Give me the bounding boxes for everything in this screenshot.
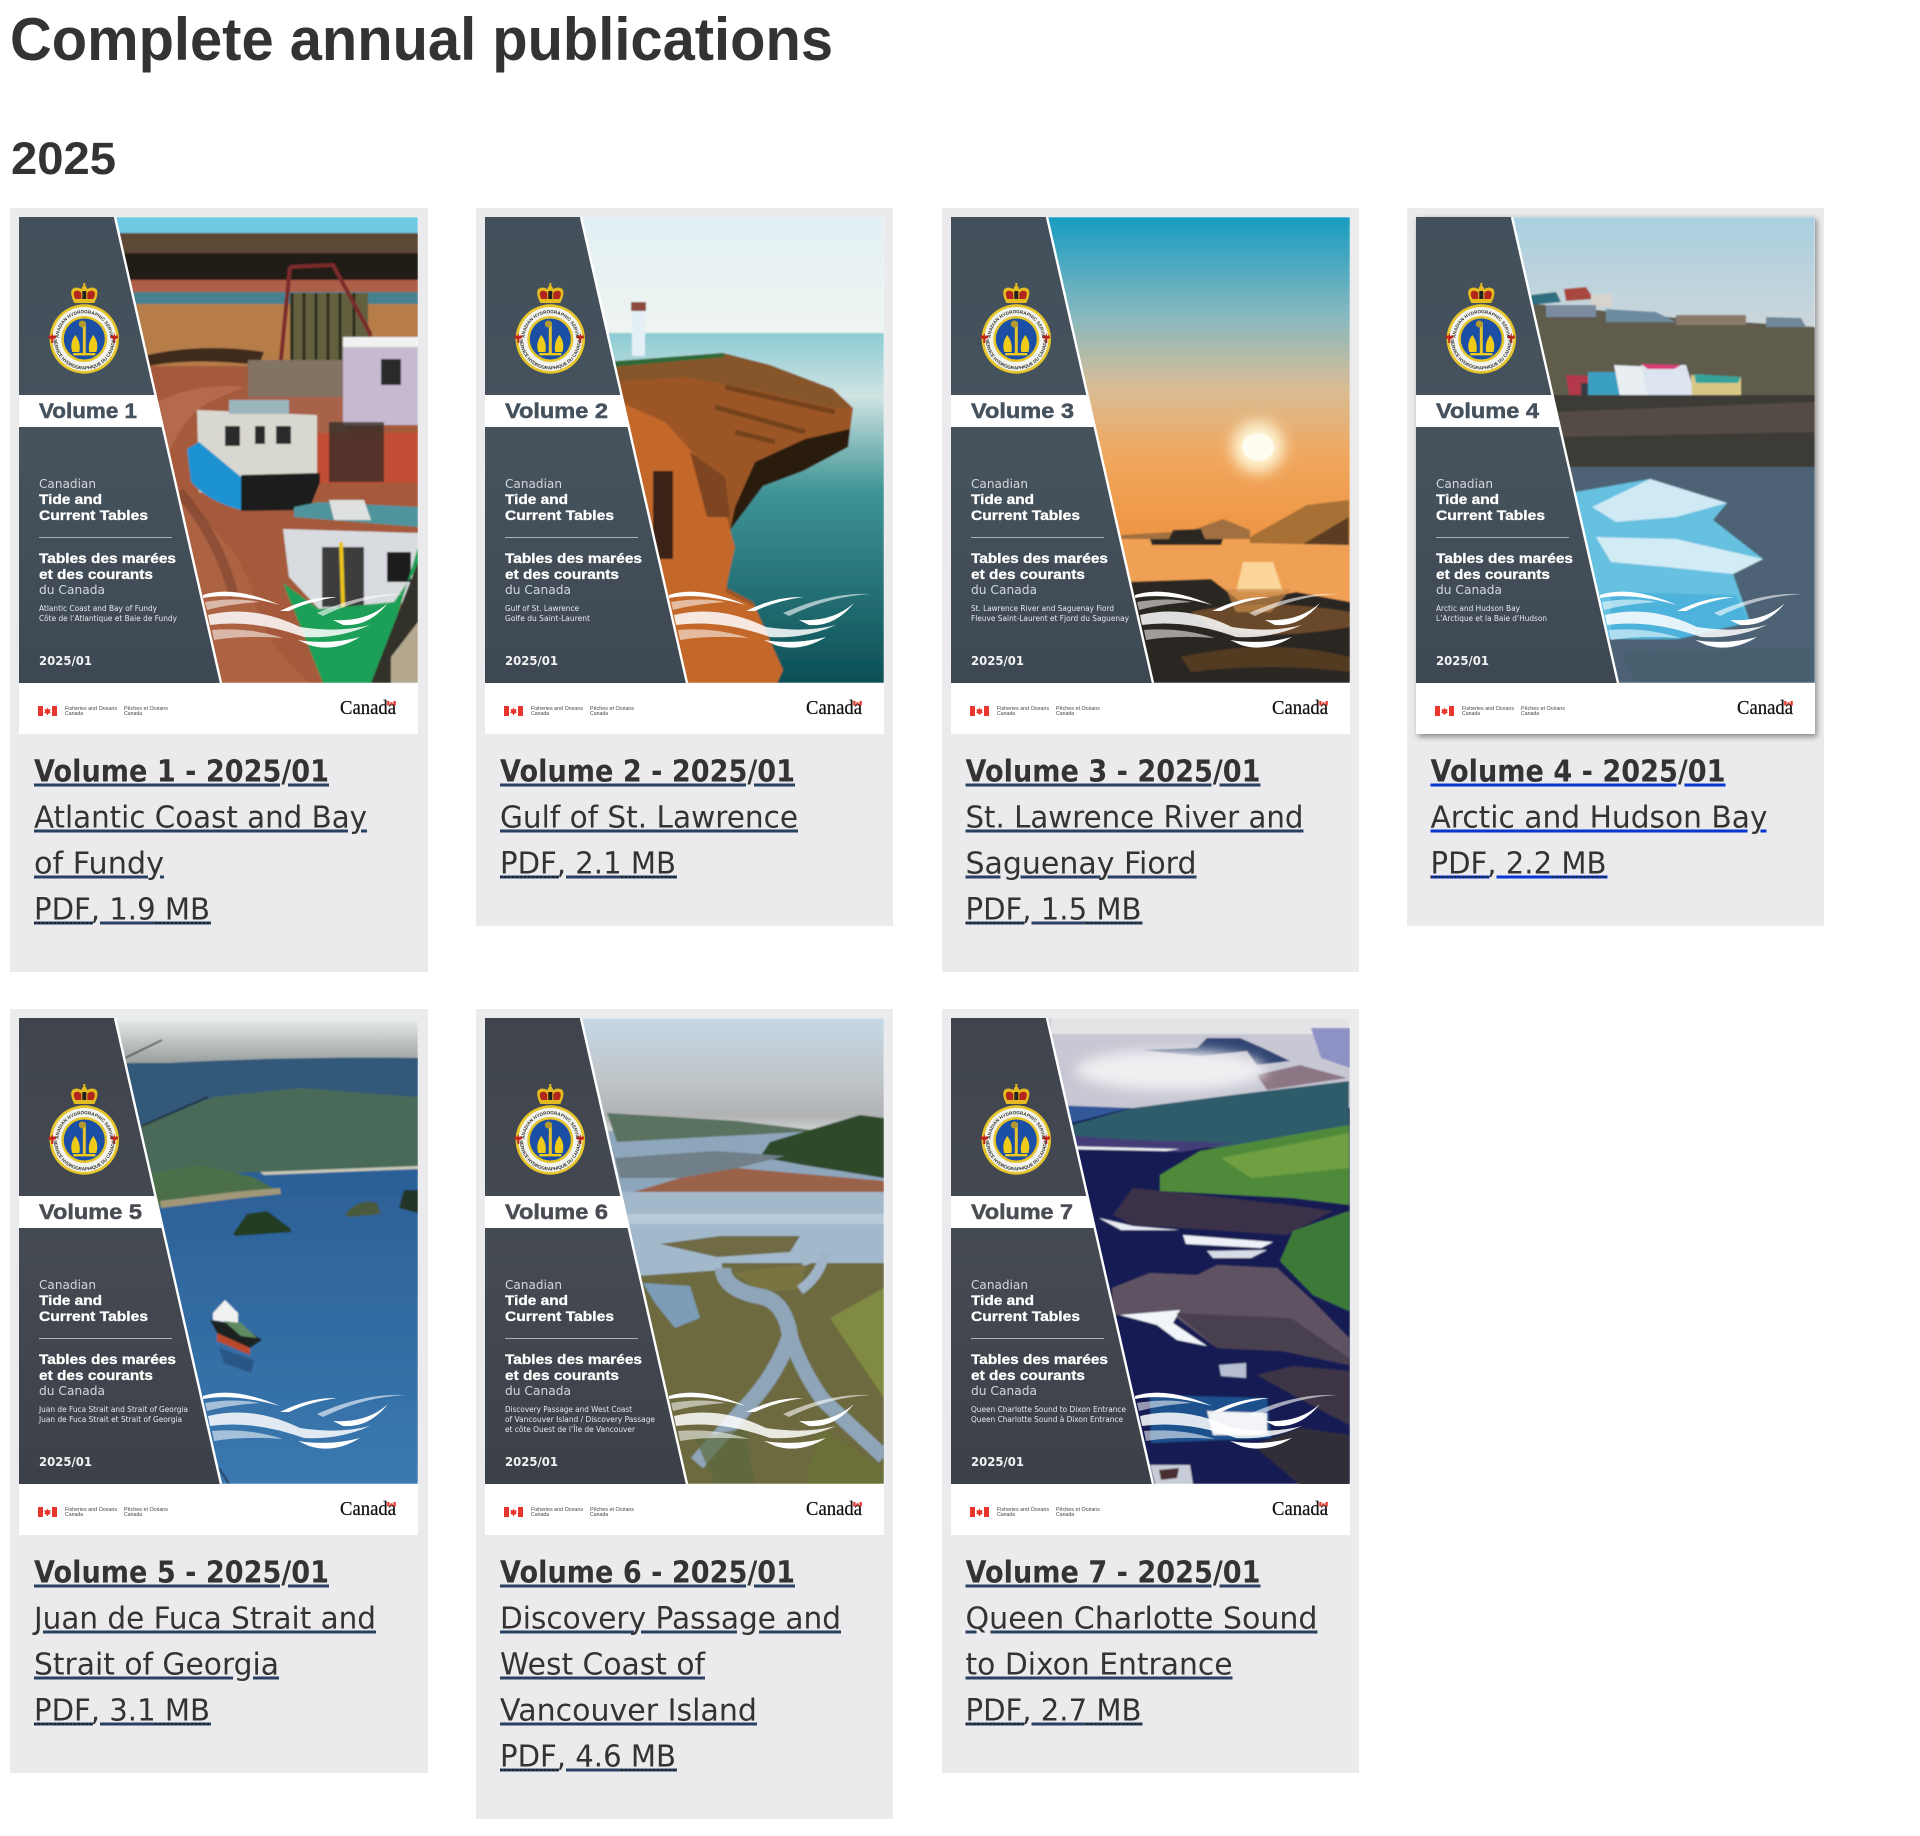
emblem ring text: SERVICE HYDROGRAPHIQUE DU CANADA bbox=[986, 339, 1047, 370]
link text: Volume 6: Vancouver Island bbox=[500, 1694, 757, 1728]
cover title text bbox=[38, 1277, 188, 1469]
footer logos: Pêches et Océans bbox=[1521, 706, 1565, 712]
footer logos bbox=[504, 697, 862, 719]
cover title text: du Canada bbox=[970, 1383, 1036, 1398]
footer logos: Canada bbox=[340, 1498, 396, 1520]
cover title text: Tables des marées bbox=[970, 1351, 1108, 1367]
link text: Volume 6: PDF, 4.6 MB bbox=[500, 1740, 676, 1774]
link text: Volume 3: PDF, 1.5 MB bbox=[965, 892, 1141, 928]
cover title text bbox=[970, 476, 1129, 668]
cover title text: Canadian bbox=[39, 476, 96, 491]
cover title text: 2025/01 bbox=[505, 653, 558, 668]
wave motif bbox=[669, 1393, 871, 1449]
footer logos: Pêches et Océans bbox=[1056, 1507, 1100, 1513]
footer logos bbox=[38, 1498, 396, 1520]
cover title text: of Vancouver Island / Discovery Passage bbox=[505, 1415, 655, 1424]
footer logos bbox=[1435, 697, 1793, 719]
cover title text: 2025/01 bbox=[1436, 653, 1489, 668]
card: Volume 7 bbox=[942, 1009, 1359, 1773]
diagonal edge bbox=[115, 1018, 221, 1484]
volume band bbox=[19, 395, 163, 427]
footer logos bbox=[38, 697, 396, 719]
cover title text: Discovery Passage and West Coast bbox=[505, 1405, 632, 1414]
cover title text: 2025/01 bbox=[39, 653, 92, 668]
link text: Volume 2: Volume 2 - 2025/01 bbox=[500, 754, 795, 790]
cover title text: Golfe du Saint-Laurent bbox=[505, 614, 590, 623]
footer logos: Pêches et Océans bbox=[124, 706, 168, 712]
volume label: Volume 2 bbox=[505, 400, 608, 423]
card: Volume 6 bbox=[476, 1009, 893, 1819]
volume band bbox=[485, 1196, 629, 1228]
dark panel bbox=[19, 217, 221, 683]
link text: Volume 4 bbox=[1430, 754, 1768, 882]
emblem ring text: CANADIAN HYDROGRAPHIC SERVICE bbox=[988, 310, 1046, 338]
link text: Volume 1: Volume 1 - 2025/01 bbox=[34, 754, 329, 790]
footer logos: Pêches et Océans bbox=[590, 706, 634, 712]
emblem ring text bbox=[986, 310, 1047, 370]
footer logos: Fisheries and Oceans bbox=[531, 706, 583, 712]
cover title text: Tide and bbox=[970, 1292, 1034, 1308]
emblem ring text bbox=[520, 1111, 581, 1170]
volume band bbox=[19, 1196, 163, 1228]
link text: Volume 2 bbox=[500, 754, 798, 882]
link text: Volume 7: Volume 7 - 2025/01 bbox=[965, 1556, 1260, 1590]
cover title text: Tables des marées bbox=[39, 550, 176, 566]
footer logos: Canada bbox=[590, 711, 608, 717]
photo: arctic village and sea ice bbox=[1513, 217, 1815, 683]
emblem bbox=[48, 1084, 119, 1175]
link text: Volume 7: to Dixon Entrance bbox=[965, 1648, 1232, 1682]
footer logos: Fisheries and Oceans bbox=[65, 706, 117, 712]
footer logos: Pêches et Océans bbox=[590, 1507, 634, 1513]
cover title text: Current Tables bbox=[970, 1308, 1080, 1324]
photo: estuary and marsh channels bbox=[582, 1018, 884, 1484]
dark panel bbox=[950, 217, 1152, 683]
link text: Volume 2: Gulf of St. Lawrence bbox=[500, 800, 798, 836]
cover title text: Tables des marées bbox=[39, 1351, 176, 1367]
footer logos: Fisheries and Oceans bbox=[1462, 706, 1514, 712]
link text: Volume 1: of Fundy bbox=[34, 846, 164, 882]
emblem bbox=[980, 1084, 1050, 1175]
link text: Volume 5 bbox=[32, 1556, 376, 1728]
wave motif bbox=[1134, 592, 1336, 648]
link text: Volume 7: PDF, 2.7 MB bbox=[965, 1694, 1141, 1728]
cover title text: Canadian bbox=[505, 476, 562, 491]
dark panel bbox=[950, 1018, 1152, 1484]
photo: sunset over fjord with ferry bbox=[1048, 217, 1350, 683]
cover title text: du Canada bbox=[1436, 582, 1502, 597]
cover title text: Canadian bbox=[970, 1277, 1028, 1292]
cover title text: Canadian bbox=[1436, 476, 1493, 491]
footer logos: Pêches et Océans bbox=[1056, 706, 1100, 712]
diagonal edge bbox=[581, 217, 687, 683]
cover title text: du Canada bbox=[39, 1383, 105, 1398]
volume label: Volume 4 bbox=[1436, 400, 1539, 423]
link text: Volume 6: Volume 6 - 2025/01 bbox=[500, 1556, 795, 1590]
card: Volume 2 bbox=[476, 208, 893, 926]
emblem ring text: CANADIAN HYDROGRAPHIC SERVICE bbox=[56, 1111, 114, 1139]
cover title text: Canadian bbox=[970, 476, 1028, 491]
cover title text: Current Tables bbox=[1436, 507, 1545, 523]
cover title text: Current Tables bbox=[39, 507, 148, 523]
footer logos: Canada bbox=[124, 711, 142, 717]
cover title text: du Canada bbox=[505, 1383, 571, 1398]
cover title text: Côte de l’Atlantique et Baie de Fundy bbox=[39, 613, 177, 623]
photo: tanker in a blue strait bbox=[116, 1018, 418, 1484]
link text: Volume 3: Volume 3 - 2025/01 bbox=[965, 754, 1260, 790]
footer logos bbox=[970, 697, 1328, 719]
cover title text: 2025/01 bbox=[39, 1454, 92, 1469]
link text: Volume 6: Discovery Passage and bbox=[500, 1602, 841, 1636]
diagonal edge bbox=[115, 217, 221, 683]
cover title text: Tables des marées bbox=[505, 1351, 642, 1367]
link text: Volume 7: Queen Charlotte Sound bbox=[965, 1602, 1317, 1636]
cover title text: Queen Charlotte Sound to Dixon Entrance bbox=[970, 1405, 1126, 1414]
cover title text: Tide and bbox=[39, 1292, 102, 1308]
footer logos: Canada bbox=[996, 1512, 1015, 1518]
link text: Volume 2: PDF, 2.1 MB bbox=[500, 846, 676, 882]
cover title text: et des courants bbox=[1436, 566, 1550, 582]
cover title text: 2025/01 bbox=[505, 1454, 558, 1469]
emblem ring text: SERVICE HYDROGRAPHIQUE DU CANADA bbox=[520, 339, 581, 370]
footer logos: Canada bbox=[1056, 1512, 1074, 1518]
cover title text: Tide and bbox=[39, 491, 102, 507]
card: Volume 4 bbox=[1407, 208, 1824, 926]
cover title text: du Canada bbox=[39, 582, 105, 597]
volume label: Volume 3 bbox=[970, 400, 1074, 423]
cover title text: Tide and bbox=[970, 491, 1034, 507]
cover title text: et côte Ouest de l’Île de Vancouver bbox=[505, 1423, 636, 1434]
cover title text: Tables des marées bbox=[970, 550, 1108, 566]
card: Volume 1 bbox=[10, 208, 428, 972]
diagonal edge bbox=[1512, 217, 1618, 683]
footer logos bbox=[970, 1498, 1328, 1520]
dark panel bbox=[19, 1018, 221, 1484]
cover title text: Current Tables bbox=[505, 507, 614, 523]
volume band bbox=[950, 395, 1094, 427]
wave motif bbox=[1600, 592, 1802, 648]
footer logos: Canada bbox=[65, 1512, 83, 1518]
link text: Volume 5: Juan de Fuca Strait and bbox=[32, 1602, 376, 1636]
volume label: Volume 6 bbox=[505, 1201, 608, 1224]
emblem ring text: SERVICE HYDROGRAPHIQUE DU CANADA bbox=[54, 1140, 115, 1170]
cover: Volume 7 bbox=[951, 1018, 1350, 1535]
wave motif bbox=[669, 592, 871, 648]
volume band bbox=[485, 395, 629, 427]
emblem bbox=[1445, 283, 1516, 374]
cover title text: Canadian bbox=[39, 1277, 96, 1292]
link text: Volume 6: West Coast of bbox=[500, 1648, 706, 1682]
cover title text bbox=[505, 1277, 655, 1469]
diagonal edge bbox=[581, 1018, 687, 1484]
cover title text: L’Arctique et la Baie d’Hudson bbox=[1436, 614, 1547, 623]
title: Complete annual publications bbox=[10, 6, 833, 73]
emblem ring text: SERVICE HYDROGRAPHIQUE DU CANADA bbox=[54, 339, 115, 370]
link text: Volume 5: Volume 5 - 2025/01 bbox=[34, 1556, 329, 1590]
volume label: Volume 7 bbox=[970, 1201, 1073, 1224]
cover title text: Arctic and Hudson Bay bbox=[1436, 604, 1520, 613]
emblem ring text: CANADIAN HYDROGRAPHIC SERVICE bbox=[988, 1111, 1046, 1139]
emblem bbox=[48, 283, 119, 374]
link text: Volume 4: Volume 4 - 2025/01 bbox=[1430, 754, 1726, 790]
cover title text: du Canada bbox=[505, 582, 571, 597]
wave motif bbox=[203, 592, 405, 648]
volume band bbox=[950, 1196, 1094, 1228]
cover: Volume 5 bbox=[19, 1018, 418, 1535]
emblem ring text bbox=[986, 1111, 1047, 1170]
footer logos: Canada bbox=[1462, 711, 1480, 717]
footer logos: Canada bbox=[806, 1498, 862, 1520]
link text: Volume 7 bbox=[965, 1556, 1317, 1728]
link text: Volume 6 bbox=[500, 1556, 841, 1774]
cover title text: et des courants bbox=[970, 566, 1085, 582]
emblem ring text bbox=[54, 1111, 115, 1170]
cover: Volume 1 bbox=[19, 217, 418, 734]
footer logos: Canada bbox=[340, 697, 396, 719]
cover title text: Current Tables bbox=[970, 507, 1080, 523]
footer logos: Canada bbox=[1737, 697, 1793, 719]
cover title text: et des courants bbox=[505, 566, 619, 582]
cover title text: et des courants bbox=[39, 1367, 153, 1383]
footer logos: Fisheries and Oceans bbox=[996, 706, 1049, 712]
diagonal edge bbox=[1046, 1018, 1152, 1484]
link text: Volume 4: Arctic and Hudson Bay bbox=[1430, 800, 1768, 836]
cover title text: Tide and bbox=[505, 491, 568, 507]
link text: Volume 3: Saguenay Fiord bbox=[965, 846, 1196, 882]
cover title text: Tide and bbox=[1436, 491, 1499, 507]
cover title text: Fleuve Saint-Laurent et Fjord du Saguenay bbox=[970, 614, 1129, 623]
card: Volume 3 bbox=[942, 208, 1359, 972]
cover title text: Juan de Fuca Strait and Strait of Georgia bbox=[38, 1405, 188, 1414]
cover: Volume 4 bbox=[1416, 216, 1815, 734]
dark panel bbox=[485, 217, 687, 683]
emblem bbox=[514, 283, 585, 374]
cover title text bbox=[1436, 476, 1573, 668]
heading: year 2025: 2025 bbox=[11, 133, 116, 184]
cover title text: Juan de Fuca Strait et Strait of Georgia bbox=[38, 1415, 182, 1424]
emblem ring text bbox=[54, 310, 115, 370]
link text: Volume 3: St. Lawrence River and bbox=[965, 800, 1303, 836]
link text: Volume 1: Atlantic Coast and Bay bbox=[34, 800, 367, 836]
dark panel bbox=[485, 1018, 687, 1484]
cover title text: Queen Charlotte Sound à Dixon Entrance bbox=[970, 1415, 1123, 1424]
cover shadow bbox=[1418, 219, 1817, 737]
cover title text bbox=[505, 476, 642, 668]
cover: Volume 2 bbox=[485, 217, 884, 734]
footer logos: Fisheries and Oceans bbox=[531, 1507, 583, 1513]
cover title text: Atlantic Coast and Bay of Fundy bbox=[39, 604, 157, 613]
cover title text bbox=[39, 476, 177, 668]
footer logos: Canada bbox=[65, 711, 83, 717]
emblem bbox=[980, 283, 1050, 374]
emblem ring text: CANADIAN HYDROGRAPHIC SERVICE bbox=[56, 310, 114, 338]
cover title text: Tide and bbox=[505, 1292, 568, 1308]
footer logos: Canada bbox=[996, 711, 1015, 717]
card: Volume 5 bbox=[10, 1009, 428, 1773]
cover: Volume 3 bbox=[951, 217, 1350, 734]
photo: rugged forested coastline bbox=[1048, 1018, 1350, 1484]
volume band bbox=[1416, 395, 1560, 427]
link text: Volume 5: PDF, 3.1 MB bbox=[34, 1694, 210, 1728]
emblem ring text: SERVICE HYDROGRAPHIQUE DU CANADA bbox=[520, 1140, 581, 1170]
footer logos: Canada bbox=[590, 1512, 608, 1518]
cover title text: Current Tables bbox=[39, 1308, 148, 1324]
cover: Volume 6 bbox=[485, 1018, 884, 1535]
footer logos: Canada bbox=[531, 1512, 549, 1518]
photo: fishing boats at low tide bbox=[116, 217, 418, 683]
cover title text: Tables des marées bbox=[1436, 550, 1573, 566]
footer logos: Canada bbox=[1272, 1498, 1328, 1520]
emblem ring text bbox=[520, 310, 581, 370]
footer logos: Fisheries and Oceans bbox=[65, 1507, 117, 1513]
cover title text: Canadian bbox=[505, 1277, 562, 1292]
footer logos bbox=[504, 1498, 862, 1520]
cover title text: du Canada bbox=[970, 582, 1036, 597]
emblem ring text: CANADIAN HYDROGRAPHIC SERVICE bbox=[522, 1111, 580, 1139]
photo: red cliffs and lighthouse bbox=[582, 217, 884, 683]
cover title text: St. Lawrence River and Saguenay Fiord bbox=[970, 604, 1114, 613]
cover title text: 2025/01 bbox=[970, 1454, 1024, 1469]
link text: Volume 1: PDF, 1.9 MB bbox=[34, 892, 210, 928]
cover title text: Current Tables bbox=[505, 1308, 614, 1324]
cover title text: et des courants bbox=[505, 1367, 619, 1383]
link text: Volume 4: PDF, 2.2 MB bbox=[1430, 846, 1606, 882]
cover title text: et des courants bbox=[970, 1367, 1085, 1383]
link text: Volume 5: Strait of Georgia bbox=[34, 1648, 279, 1682]
diagonal edge bbox=[1046, 217, 1152, 683]
footer logos: Canada bbox=[124, 1512, 142, 1518]
footer logos: Fisheries and Oceans bbox=[996, 1507, 1049, 1513]
footer logos: Pêches et Océans bbox=[124, 1507, 168, 1513]
cover title text bbox=[970, 1277, 1126, 1469]
cover title text: Gulf of St. Lawrence bbox=[505, 604, 579, 613]
emblem bbox=[514, 1084, 585, 1175]
footer logos: Canada bbox=[531, 711, 549, 717]
emblem ring text bbox=[1450, 310, 1512, 370]
dark panel bbox=[1416, 217, 1618, 683]
footer logos: Canada bbox=[1521, 711, 1539, 717]
emblem ring text: SERVICE HYDROGRAPHIQUE DU CANADA bbox=[1450, 339, 1512, 370]
emblem ring text: CANADIAN HYDROGRAPHIC SERVICE bbox=[522, 310, 580, 338]
wave motif bbox=[203, 1393, 405, 1449]
footer logos: Canada bbox=[1056, 711, 1074, 717]
wave motif bbox=[1134, 1393, 1336, 1449]
emblem ring text: SERVICE HYDROGRAPHIQUE DU CANADA bbox=[986, 1140, 1047, 1170]
volume label: Volume 5 bbox=[39, 1201, 142, 1224]
footer logos: Canada bbox=[806, 697, 862, 719]
link text: Volume 3 bbox=[965, 754, 1303, 928]
cover title text: et des courants bbox=[39, 566, 153, 582]
link text: Volume 1 bbox=[34, 754, 367, 928]
emblem ring text: CANADIAN HYDROGRAPHIC SERVICE bbox=[1452, 310, 1510, 338]
cover title text: 2025/01 bbox=[970, 653, 1024, 668]
cover title text: Tables des marées bbox=[505, 550, 642, 566]
footer logos: Canada bbox=[1272, 697, 1328, 719]
volume label: Volume 1 bbox=[39, 400, 137, 423]
